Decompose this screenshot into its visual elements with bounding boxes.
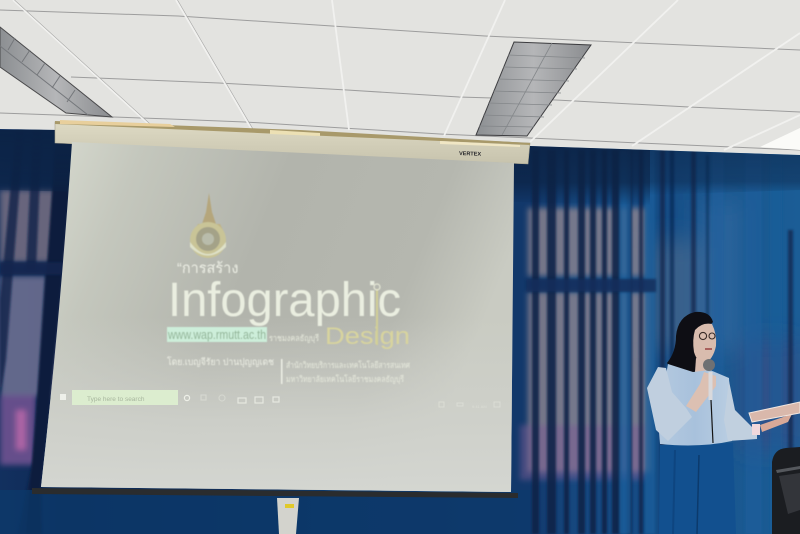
screen bottom bar [32, 488, 518, 498]
website highlight: www.wap.rmutt.ac.th [167, 328, 266, 342]
curtain heading shadow [0, 130, 650, 205]
organisation [286, 360, 410, 385]
curtain folds [0, 130, 793, 534]
brand label: VERTEX [459, 151, 481, 158]
system tray [439, 402, 500, 409]
hand holding tablet [760, 414, 792, 432]
curtain [0, 125, 800, 534]
ceiling light: right [476, 42, 591, 136]
projector screen casing [55, 120, 530, 164]
lips [705, 348, 712, 350]
search box: Type here to search [87, 396, 145, 403]
right sleeve [724, 381, 757, 441]
ceiling [0, 0, 800, 160]
skylight corner [760, 128, 800, 150]
neck [695, 358, 708, 372]
wrist watch [752, 424, 760, 435]
presenter name: โดย.เบญจีรัยา ปานปุญญเดช [167, 356, 274, 368]
ceiling light: left [0, 27, 112, 117]
logo: university emblem [190, 193, 226, 258]
vertical accent line [376, 289, 378, 345]
face [693, 324, 716, 364]
title: Design: Design [325, 323, 410, 350]
hair [667, 312, 713, 375]
left sleeve [647, 367, 692, 441]
slide content [167, 193, 410, 385]
taskbar [60, 390, 500, 409]
window glow behind curtain: right side [520, 208, 650, 480]
glasses [699, 332, 715, 340]
tablet [749, 402, 800, 422]
thai heading: “การสร้าง [177, 260, 238, 277]
soft glow: right curtain [650, 200, 800, 450]
divider [281, 359, 282, 384]
microphone [703, 359, 715, 443]
organisation: สำนักวิทยบริการและเทคโนโลยีสารสนเทศ [286, 360, 410, 370]
lower dark band [0, 490, 324, 534]
trousers [659, 443, 736, 534]
system tray: 9:41 AM [472, 404, 487, 409]
window frame bands [0, 262, 62, 275]
organisation: มหาวิทยาลัยเทคโนโลยีราชมงคลธัญบุรี [286, 374, 404, 385]
blouse [658, 364, 732, 445]
title: Infographic: Infographic [168, 274, 401, 327]
pull handle [277, 498, 299, 534]
window glow behind curtain: left side [0, 190, 62, 465]
start icon [60, 394, 66, 400]
office chair [772, 447, 800, 534]
accent dot ring [374, 284, 380, 290]
presenter [647, 312, 800, 534]
taskbar icons [184, 395, 279, 403]
location note: ราชมงคลธัญบุรี [269, 333, 319, 344]
forearm and hand holding microphone [686, 372, 716, 412]
search box [72, 390, 178, 405]
projector screen [41, 142, 514, 492]
